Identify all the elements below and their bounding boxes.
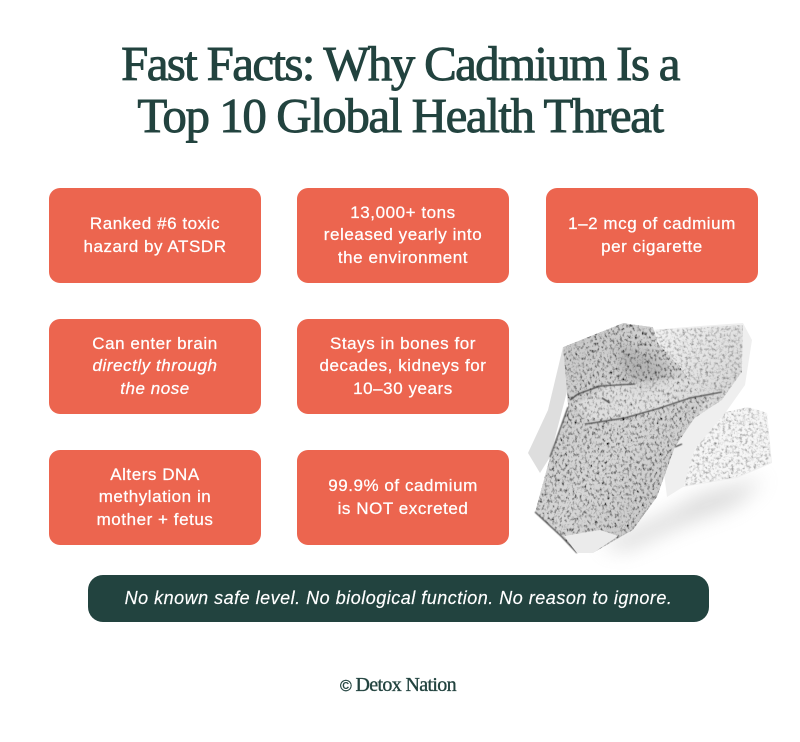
fact card: excretion: 99.9% of cadmium xyxy=(328,476,478,495)
banner: No known safe level. No biological function. No reason to ignore. xyxy=(125,588,672,608)
fact card: retention: decades, kidneys for xyxy=(320,356,486,375)
fact card: DNA methylation: methylation in xyxy=(99,487,211,506)
fact card: excretion: is NOT excreted xyxy=(338,498,468,518)
fact card: tons released: released yearly into xyxy=(324,225,482,244)
title: Top 10 Global Health Threat xyxy=(137,88,663,143)
fact card: cigarette: 1–2 mcg of cadmium xyxy=(568,214,736,233)
fact card: cigarette xyxy=(546,188,758,283)
fact card: brain entry xyxy=(49,319,261,414)
fact card: tons released: the environment xyxy=(338,248,468,267)
fact card: brain entry: directly through xyxy=(92,356,218,375)
front rock xyxy=(535,323,715,553)
title: Fast Facts: Why Cadmium Is a xyxy=(121,36,679,91)
rock shadow xyxy=(600,478,765,550)
back rock xyxy=(650,323,772,497)
rock bottom chip xyxy=(564,530,618,553)
fact card: DNA methylation: mother + fetus xyxy=(97,510,213,529)
fact card: retention: 10–30 years xyxy=(353,379,453,398)
title xyxy=(121,36,680,143)
left sliver xyxy=(528,347,570,473)
fact card: retention xyxy=(297,319,509,414)
fact card: excretion xyxy=(297,450,509,545)
fact card: ATSDR rank xyxy=(49,188,261,283)
fact card: DNA methylation: Alters DNA xyxy=(110,465,200,484)
rock crack lines xyxy=(535,384,722,553)
fact card: tons released: 13,000+ tons xyxy=(350,203,456,222)
fact card: retention: Stays in bones for xyxy=(330,334,476,353)
fact card: ATSDR rank: hazard by ATSDR xyxy=(83,236,227,256)
image: cadmium rock xyxy=(528,323,772,555)
fact card: brain entry: Can enter brain xyxy=(92,334,218,353)
fact card: ATSDR rank: Ranked #6 toxic xyxy=(90,214,220,233)
fact card: brain entry: the nose xyxy=(120,379,190,398)
fact card: DNA methylation xyxy=(49,450,261,545)
fact card: cigarette: per cigarette xyxy=(601,236,703,256)
logo: Detox Nation: © Detox Nation xyxy=(340,674,456,696)
fact card: tons released xyxy=(297,188,509,283)
banner xyxy=(88,575,709,622)
